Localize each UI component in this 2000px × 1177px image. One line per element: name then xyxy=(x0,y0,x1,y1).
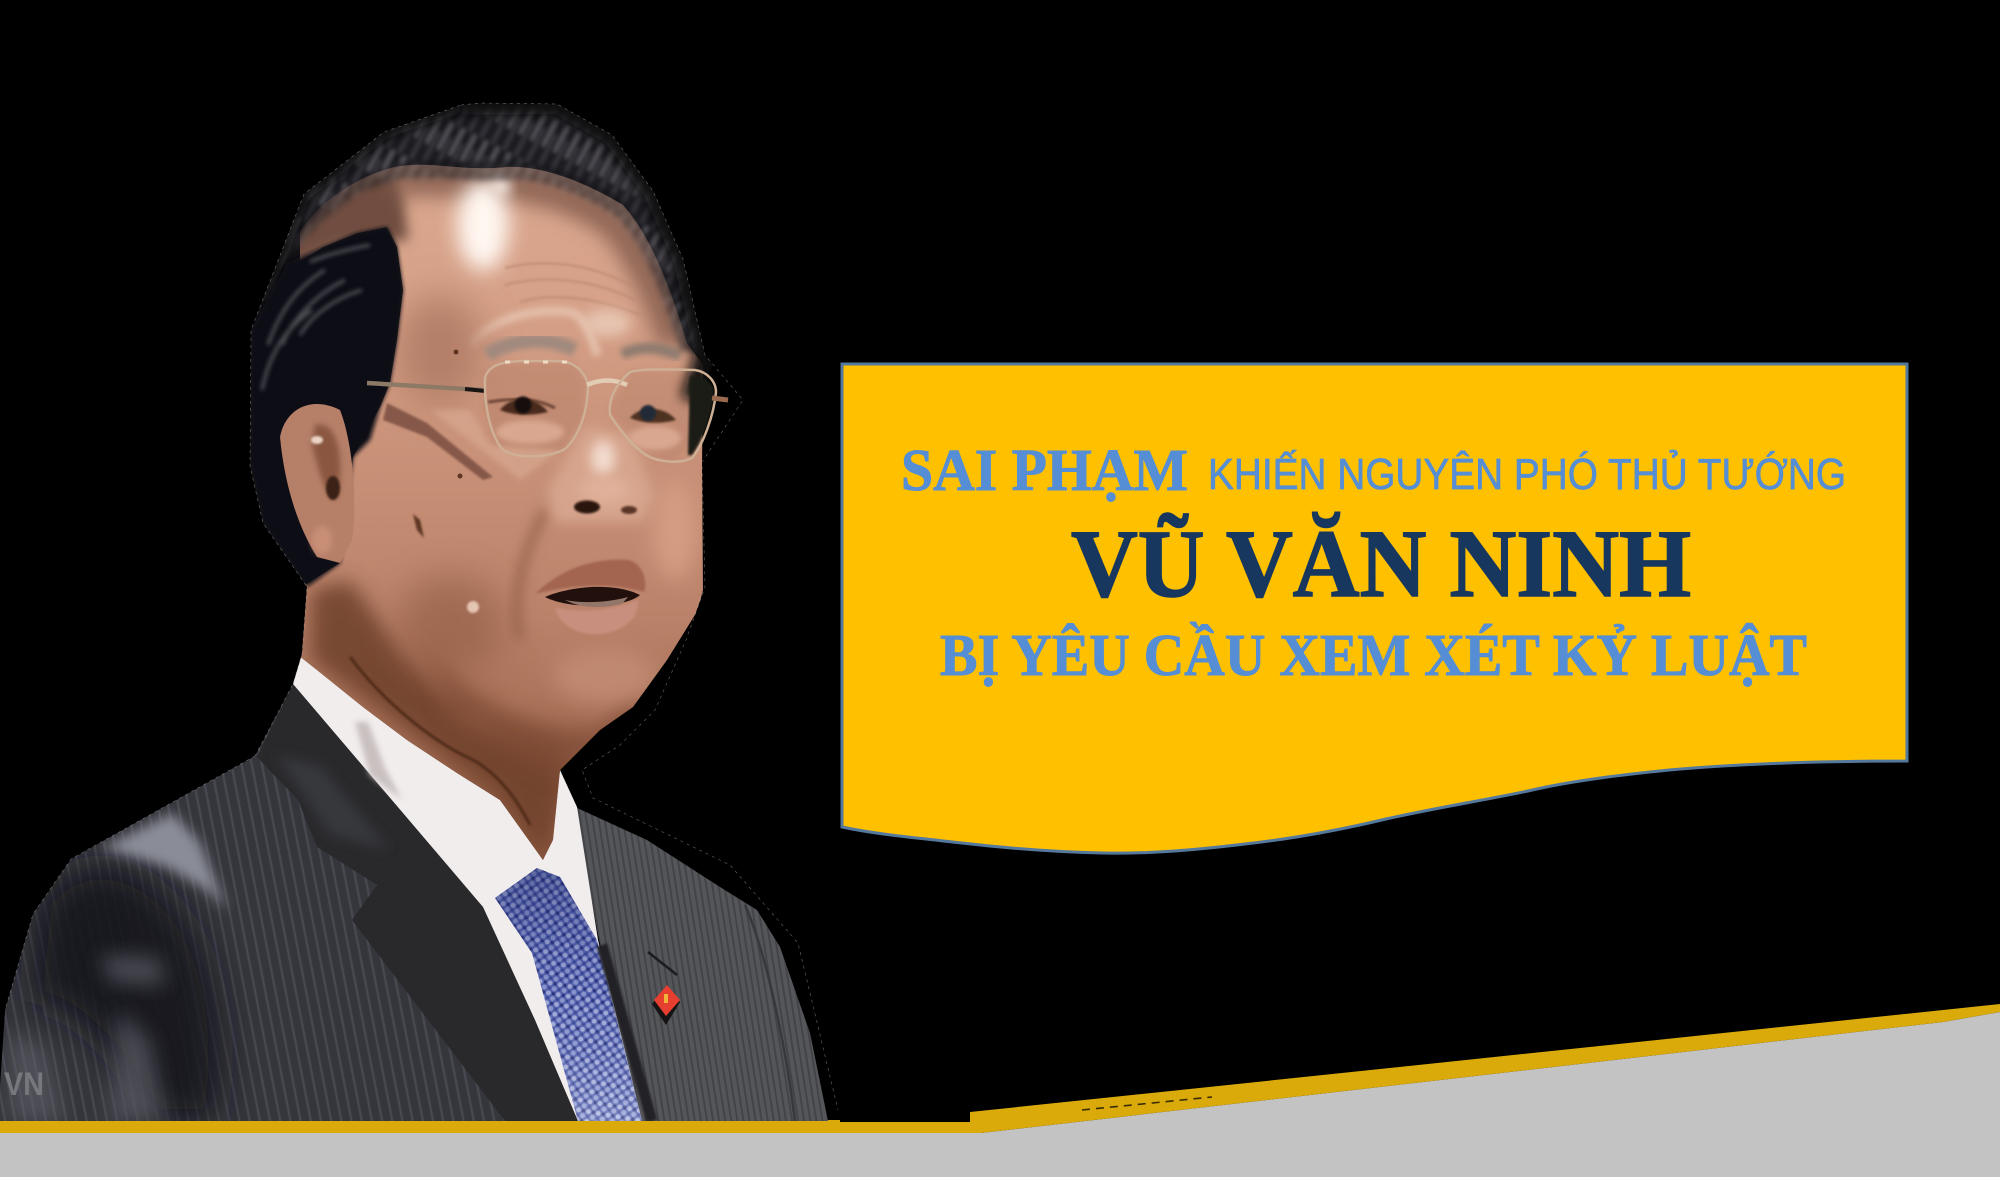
necktie xyxy=(495,868,642,1121)
hair outer dark edge xyxy=(461,104,705,400)
top hair band xyxy=(251,104,705,400)
right shoulder seam xyxy=(745,905,795,1121)
headline name: VŨ VĂN NINH xyxy=(1071,510,1691,617)
forehead wrinkles xyxy=(505,263,640,315)
bottom grey ground xyxy=(0,1012,2000,1177)
forehead highlight xyxy=(457,176,510,271)
lens area tint xyxy=(485,363,688,447)
glasses cast shadow on cheek xyxy=(383,403,493,480)
open mouth xyxy=(545,587,640,606)
suit jacket right xyxy=(575,807,828,1121)
hair fringe fading into forehead xyxy=(251,104,705,355)
right lapel edge xyxy=(602,945,652,1121)
nasolabial fold xyxy=(517,510,545,640)
gold ribbon xyxy=(0,1004,2000,1133)
title banner xyxy=(842,364,1907,853)
headline line 1: SAI PHẠM xyxy=(901,437,1188,503)
suit shoulder light and shade xyxy=(10,813,227,1121)
jaw and neck shadow xyxy=(310,575,640,860)
hair outer dark edge left xyxy=(262,105,461,300)
headline line 1 continued: KHIẾN NGUYÊN PHÓ THỦ TƯỚNG xyxy=(1208,448,1846,499)
eyes xyxy=(488,396,676,423)
teeth xyxy=(565,597,628,607)
side hair block xyxy=(250,227,403,587)
buttonhole xyxy=(648,952,677,975)
head hair mass xyxy=(250,162,703,584)
under-eye light xyxy=(496,420,681,450)
eyeglasses xyxy=(367,361,728,462)
lapel sheen xyxy=(284,760,378,844)
brow bulge xyxy=(470,309,631,355)
lapel pin xyxy=(652,985,680,1025)
banner shape xyxy=(842,364,1907,853)
thin hair zone xyxy=(300,166,415,260)
cut-out outline around portrait xyxy=(5,103,838,1110)
suit jacket left xyxy=(0,684,600,1121)
facial shading xyxy=(280,165,697,860)
ear xyxy=(280,404,354,563)
side hair xyxy=(250,227,403,587)
face and neck xyxy=(298,165,703,860)
jaw crease xyxy=(350,657,530,825)
headline line 3: BỊ YÊU CẦU XEM XÉT KỶ LUẬT xyxy=(940,622,1807,688)
side hair grey strands xyxy=(262,245,370,390)
upper lip xyxy=(535,560,645,594)
nose xyxy=(548,425,655,522)
portrait of Vu Van Ninh xyxy=(0,104,828,1121)
hair band body xyxy=(251,104,705,355)
chin tone xyxy=(553,647,657,703)
shirt xyxy=(293,655,642,1121)
right cheek light xyxy=(653,480,697,580)
left lapel xyxy=(257,684,578,1121)
cheek light beside band xyxy=(430,410,560,480)
lower lip xyxy=(555,600,638,634)
facial moles xyxy=(413,350,479,613)
agency watermark: VN xyxy=(4,1066,44,1102)
grey eyebrows xyxy=(487,341,680,356)
side of forehead shade xyxy=(398,295,482,405)
hairline softening xyxy=(395,180,675,345)
shirt collar shadow xyxy=(355,722,402,800)
